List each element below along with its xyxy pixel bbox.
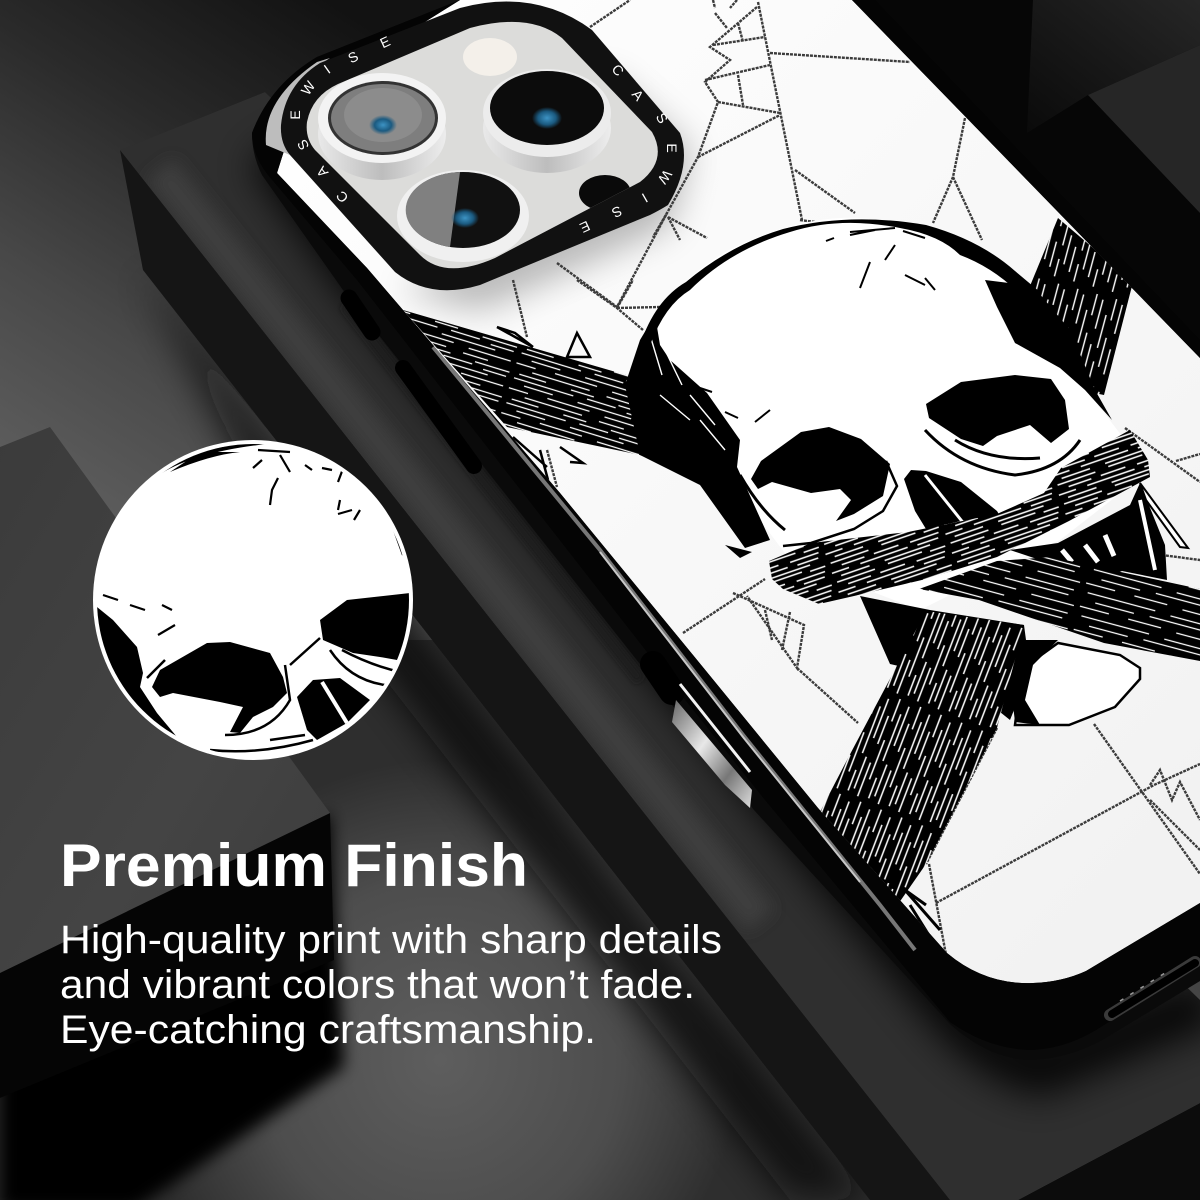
silver side button [672, 684, 752, 808]
top right wall [860, 0, 1200, 360]
bottom port [1110, 962, 1195, 1015]
lower jaw [1015, 643, 1140, 725]
lens 3 [397, 170, 529, 262]
brand lettering: C [333, 188, 351, 206]
print strip around corner [266, 58, 330, 155]
zoomed detail circle [90, 440, 413, 760]
skull cranium [808, 220, 1121, 608]
brand lettering: W [298, 77, 319, 98]
inset nose cavity [297, 678, 370, 740]
left plank [403, 310, 643, 456]
lit floor [0, 640, 1000, 1200]
skull left shading [625, 315, 770, 558]
skull cracks [700, 228, 935, 422]
inset right eye socket [320, 593, 410, 660]
inset skull cracks [103, 450, 403, 635]
case side sheen [345, 305, 640, 680]
side button slots [349, 298, 672, 692]
brand lettering: I [321, 61, 333, 77]
top right plank [1030, 218, 1133, 395]
heading: Premium Finish [60, 832, 528, 899]
teeth and jaw shadow [1010, 483, 1188, 580]
skull top outline [640, 219, 1040, 345]
brand lettering: I [639, 190, 651, 206]
brand lettering: S [653, 110, 671, 126]
brand lettering: S [294, 137, 312, 153]
brand lettering: S [609, 203, 625, 221]
right eye socket [926, 375, 1069, 446]
inset left eye socket [152, 642, 287, 733]
description text: Eye-catching craftsmanship. [60, 1008, 596, 1052]
microphone dot [579, 175, 630, 208]
skull temple shadow [985, 280, 1112, 420]
right plank [919, 557, 1200, 661]
spider web lines [513, 0, 1200, 960]
lens 2 [483, 69, 611, 173]
brand lettering: E [377, 33, 393, 51]
printed screen [277, 0, 1200, 983]
black bumper ring [281, 2, 684, 290]
brand lettering: W [654, 167, 675, 188]
glossy frame highlight [433, 347, 915, 950]
mouth band [769, 430, 1150, 604]
inset cranium top arc [162, 444, 264, 473]
lower left block top [0, 427, 330, 973]
plank twigs [497, 327, 590, 480]
description text: High-quality print with sharp details [60, 918, 722, 962]
nose cavity [904, 470, 1000, 529]
brand lettering: E [664, 143, 680, 153]
brand lettering: E [577, 218, 593, 236]
brand lettering: E [287, 110, 303, 120]
brand lettering: S [345, 48, 361, 66]
glass opening [307, 22, 658, 268]
lower plank [819, 611, 1024, 910]
brand lettering: A [629, 86, 648, 104]
front black rim [252, 0, 1200, 1050]
island shadow on print [400, 70, 690, 310]
left eye socket [751, 427, 890, 521]
top right box top [1088, 45, 1200, 213]
inset left shading [90, 607, 177, 737]
long box side face [120, 150, 950, 1200]
phone cast shadow on box [270, 150, 1200, 1070]
phone with printed case [252, 0, 1200, 1060]
long box cast shadow [143, 270, 870, 1200]
lens 1 [318, 73, 446, 180]
description text: and vibrant colors that won’t fade. [60, 963, 695, 1007]
brand lettering [287, 33, 680, 236]
brand lettering: C [609, 61, 627, 79]
description text [60, 918, 722, 1052]
case body [252, 0, 1200, 1060]
camera island [266, 2, 684, 290]
bottom right dark block [1018, 1103, 1200, 1200]
flash [463, 38, 517, 76]
inset bone lines [147, 638, 400, 751]
lower left block face [0, 813, 344, 1200]
brand lettering: A [312, 163, 331, 181]
